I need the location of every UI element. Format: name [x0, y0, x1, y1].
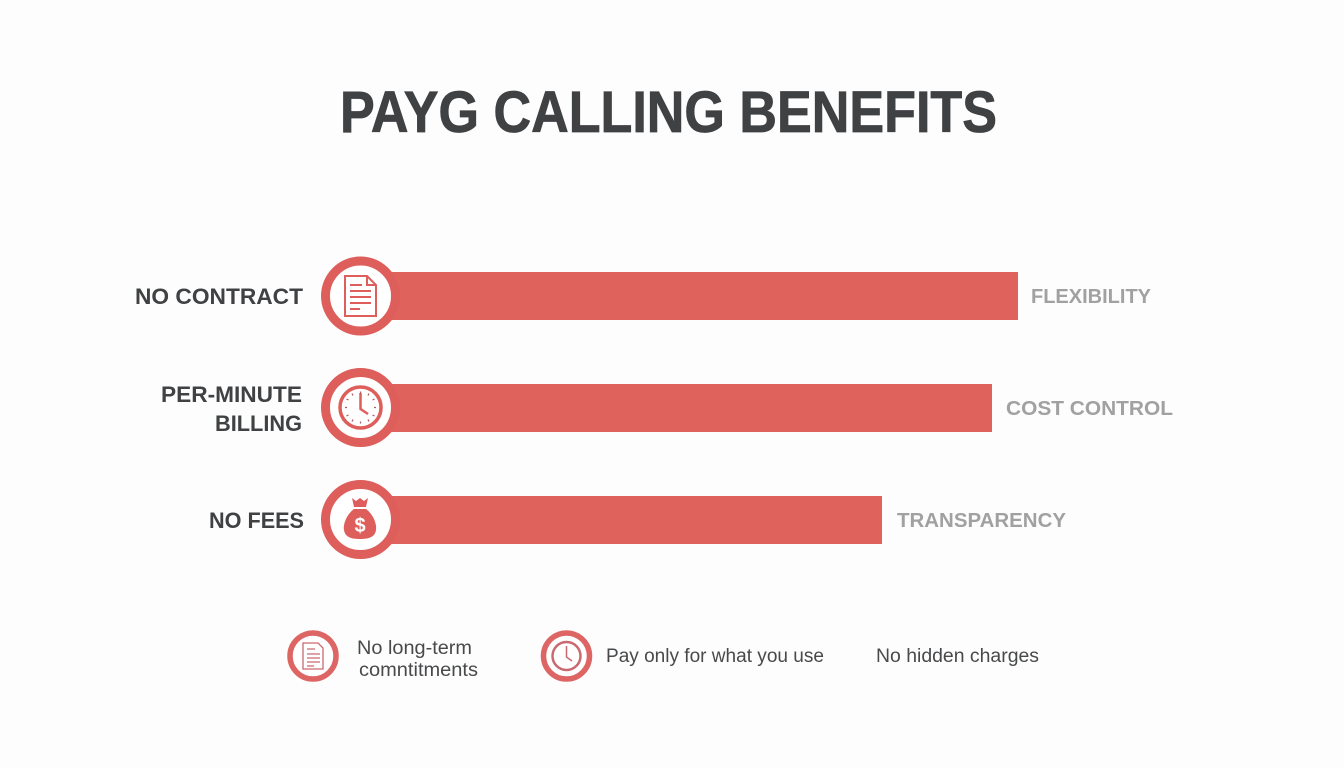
bar value label: cost control: COST CONTROL	[1006, 398, 1173, 420]
icon: money bag	[326, 484, 396, 554]
legend text: no long-term commitments: No long-term	[357, 638, 472, 659]
row label: per-minute billing: PER-MINUTE	[161, 382, 302, 407]
row label: no fees: NO FEES	[209, 508, 304, 533]
row 3: no fees	[209, 484, 1067, 554]
bar: transparency	[380, 496, 882, 544]
bar: flexibility	[380, 272, 1018, 320]
icon: clock	[326, 372, 396, 442]
legend item: no long-term commitments	[290, 633, 478, 681]
row label: per-minute billing: BILLING	[215, 411, 302, 436]
icon: document	[326, 261, 396, 331]
row label: no contract: NO CONTRACT	[135, 284, 304, 309]
bar value label: flexibility: FLEXIBILITY	[1031, 286, 1152, 308]
bar value label: transparency: TRANSPARENCY	[897, 510, 1067, 532]
row 1: no contract	[135, 261, 1152, 331]
legend icon: document	[290, 633, 336, 679]
legend icon: clock	[544, 633, 590, 679]
title: PAYG CALLING BENEFITS	[340, 80, 997, 145]
legend item: pay only for what you use	[544, 633, 824, 679]
icon: money bag: $	[354, 515, 366, 537]
legend text: no hidden charges: No hidden charges	[876, 646, 1039, 667]
legend text: pay only for what you use: Pay only for what you use	[606, 646, 824, 667]
bar: cost control	[380, 384, 992, 432]
legend text: no long-term commitments: comntitments	[359, 660, 478, 681]
row 2: per-minute billing	[161, 372, 1173, 442]
